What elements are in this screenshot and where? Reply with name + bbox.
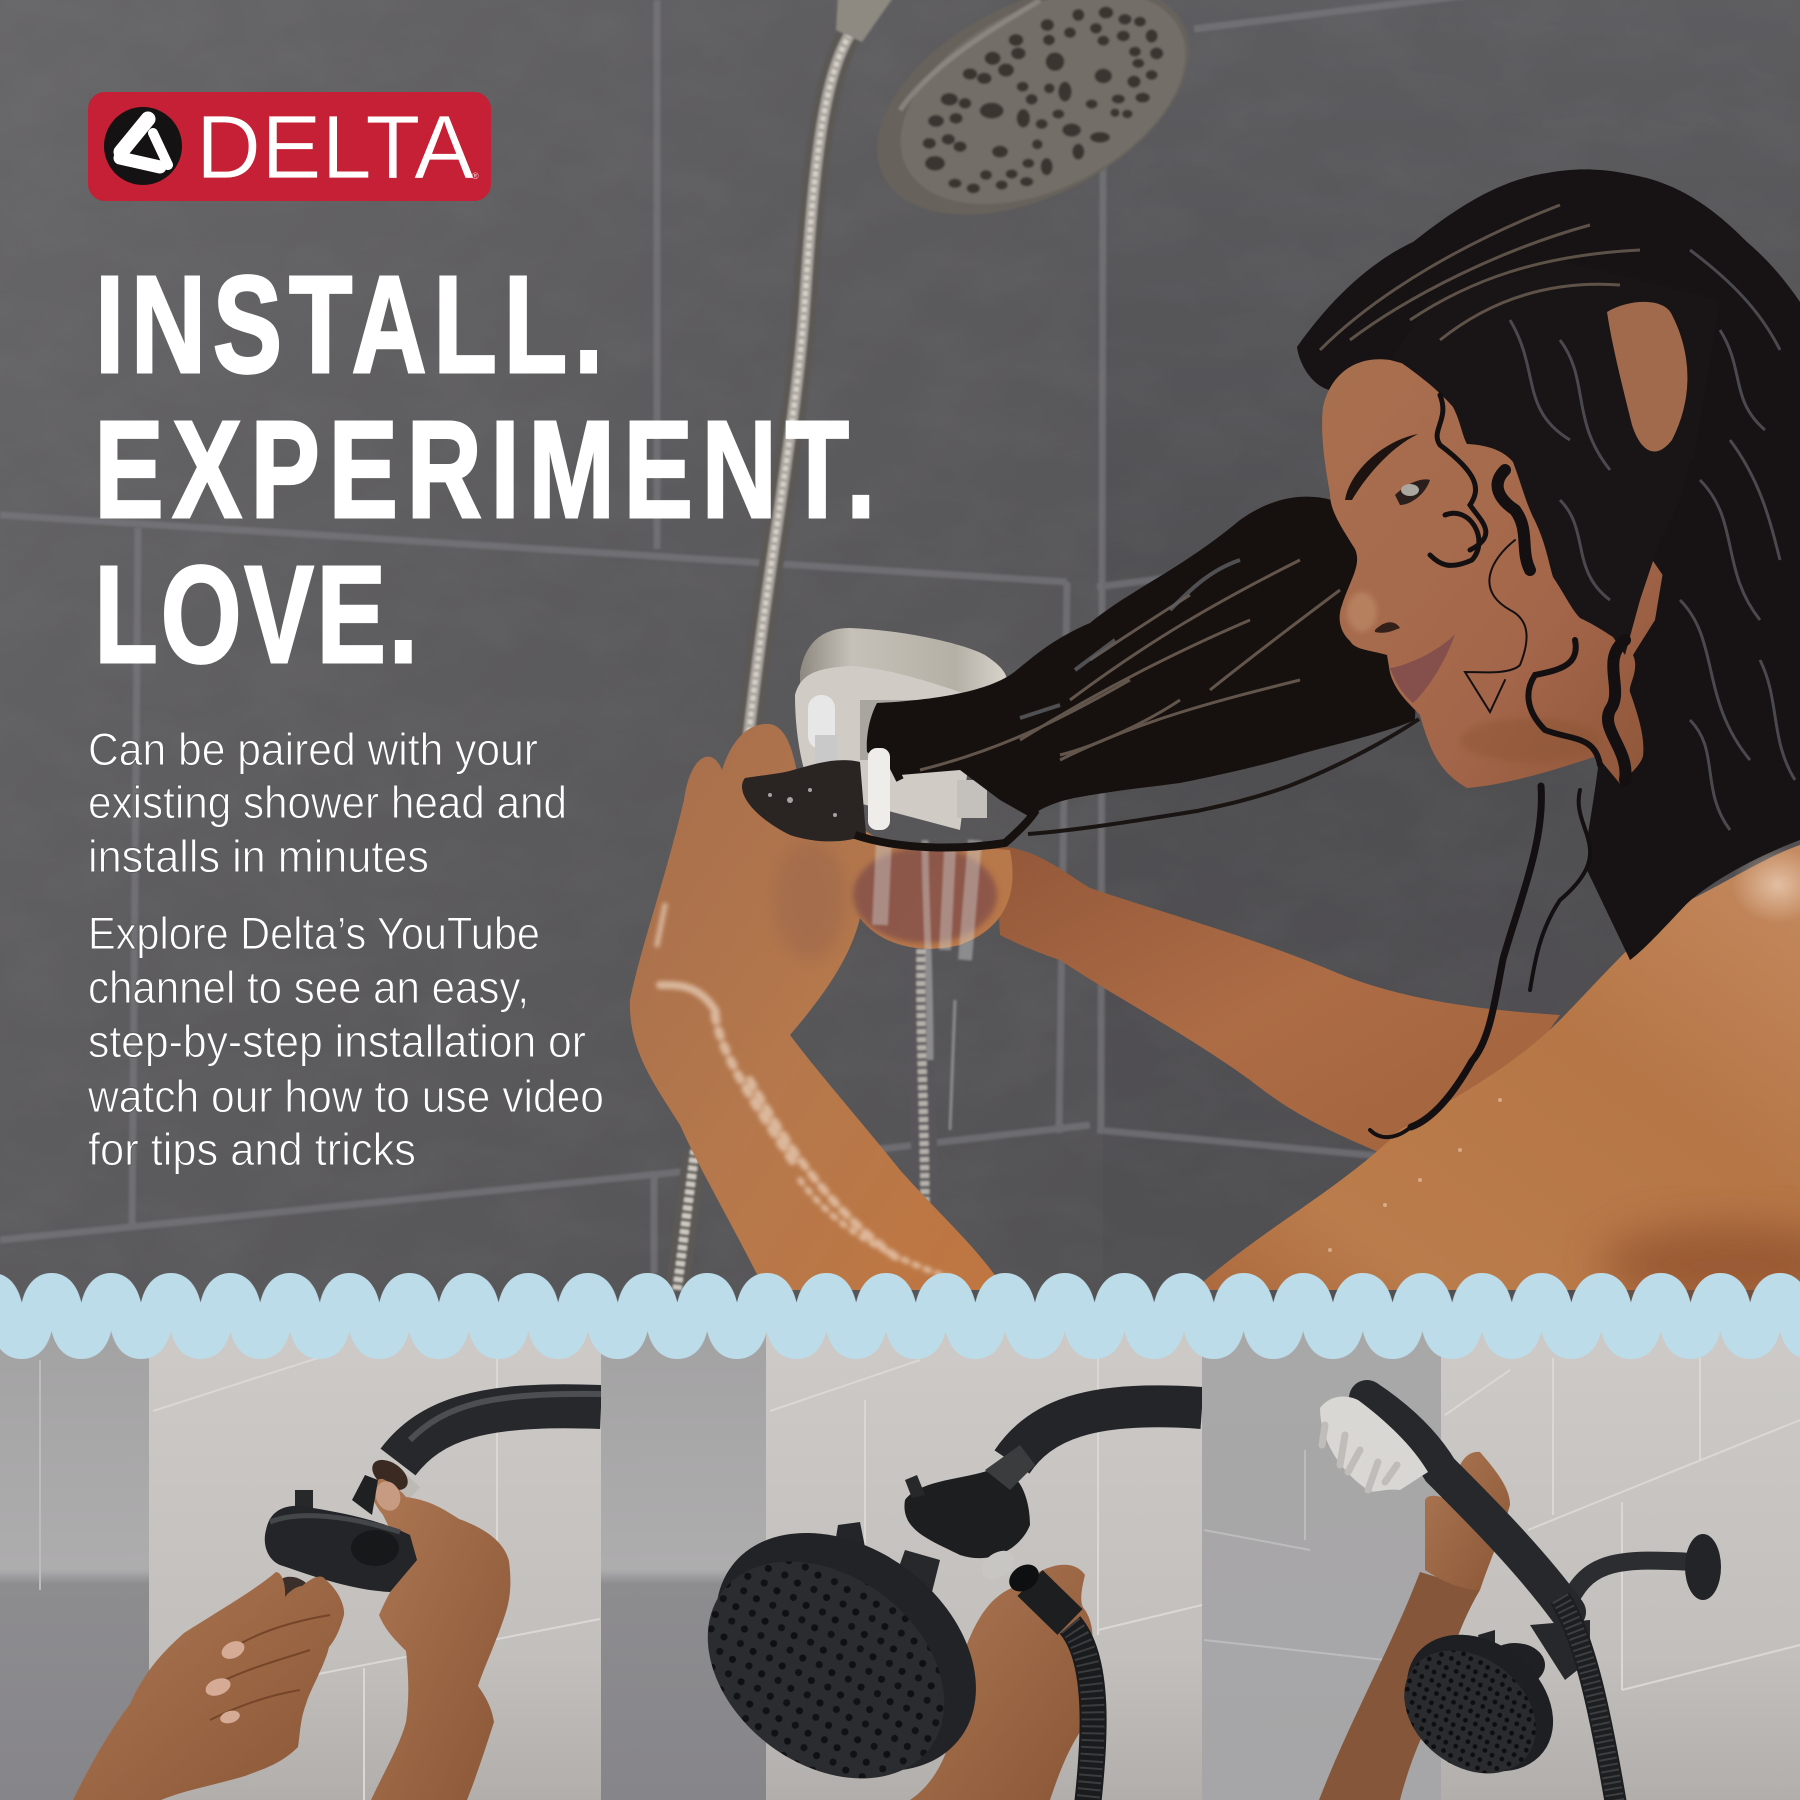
title: LOVE.	[94, 538, 418, 691]
text block: YouTube channel: watch our how to use video	[87, 1071, 604, 1122]
text block: YouTube channel: step-by-step installation or	[88, 1016, 586, 1067]
slate tile wall	[0, 0, 1800, 1340]
title	[94, 248, 875, 691]
text block: pairing and installation: existing shower head and	[88, 777, 567, 828]
hair shine	[1320, 205, 1795, 830]
ear	[1607, 302, 1687, 452]
text block: YouTube channel: Explore Delta’s YouTube	[88, 908, 540, 959]
right hand	[371, 1478, 510, 1800]
hand holding hose	[910, 1565, 1094, 1800]
icon: Delta triangle mark	[104, 107, 182, 185]
hose end	[1004, 1559, 1093, 1800]
small shower head	[1380, 1606, 1580, 1800]
scalloped water band	[0, 1273, 1800, 1359]
tile background	[1202, 1320, 1800, 1800]
hose and mount	[1530, 1598, 1617, 1800]
diverter mount	[265, 1475, 417, 1608]
woman's face	[1322, 359, 1662, 788]
overhead shower head	[878, 0, 1188, 214]
large shower head	[666, 1484, 1022, 1800]
text block: YouTube channel	[87, 908, 604, 1175]
falling water	[880, 840, 975, 1130]
far arm	[995, 845, 1560, 1155]
text block: pairing and installation: Can be paired with your	[88, 724, 538, 775]
near arm and hand	[630, 724, 1013, 1290]
title: EXPERIMENT.	[94, 393, 875, 546]
shower arm	[367, 1394, 601, 1496]
left hand	[73, 1572, 344, 1800]
text block: YouTube channel: channel to see an easy,	[88, 962, 529, 1013]
tile background	[0, 1320, 601, 1800]
front curls over temple and neck	[1402, 363, 1653, 655]
panel: hero shower photo	[0, 0, 1800, 1340]
hand	[1425, 1452, 1510, 1590]
panel: step 2 connect hose	[601, 1320, 1202, 1800]
panel: step 3 hand shower in use	[1202, 1320, 1800, 1800]
forearm	[1319, 1572, 1480, 1800]
logo: Delta badge	[88, 92, 491, 201]
shower arm	[1012, 1406, 1202, 1462]
curly hair strands	[1370, 395, 1626, 1137]
hand shower	[1320, 1396, 1568, 1612]
text block: pairing and installation	[88, 724, 567, 882]
panel: step 1 attach mount	[0, 1320, 601, 1800]
hair over neck	[1588, 574, 1688, 960]
tile background	[601, 1320, 1202, 1800]
hair back mass	[1297, 169, 1800, 960]
long wet hair held to the shower head	[742, 497, 1420, 848]
text block: YouTube channel: for tips and tricks	[88, 1124, 416, 1175]
scalp massager hand shower	[795, 628, 1007, 830]
registered mark: ®	[472, 171, 479, 181]
woman's shoulder	[1194, 845, 1800, 1305]
hand shower hose	[677, 0, 925, 1290]
wordmark: DELTA	[196, 98, 474, 198]
title: INSTALL.	[95, 248, 603, 401]
text block: pairing and installation: installs in minutes	[88, 831, 429, 882]
mount	[880, 1445, 1035, 1620]
wall arm and flange	[1570, 1534, 1721, 1600]
